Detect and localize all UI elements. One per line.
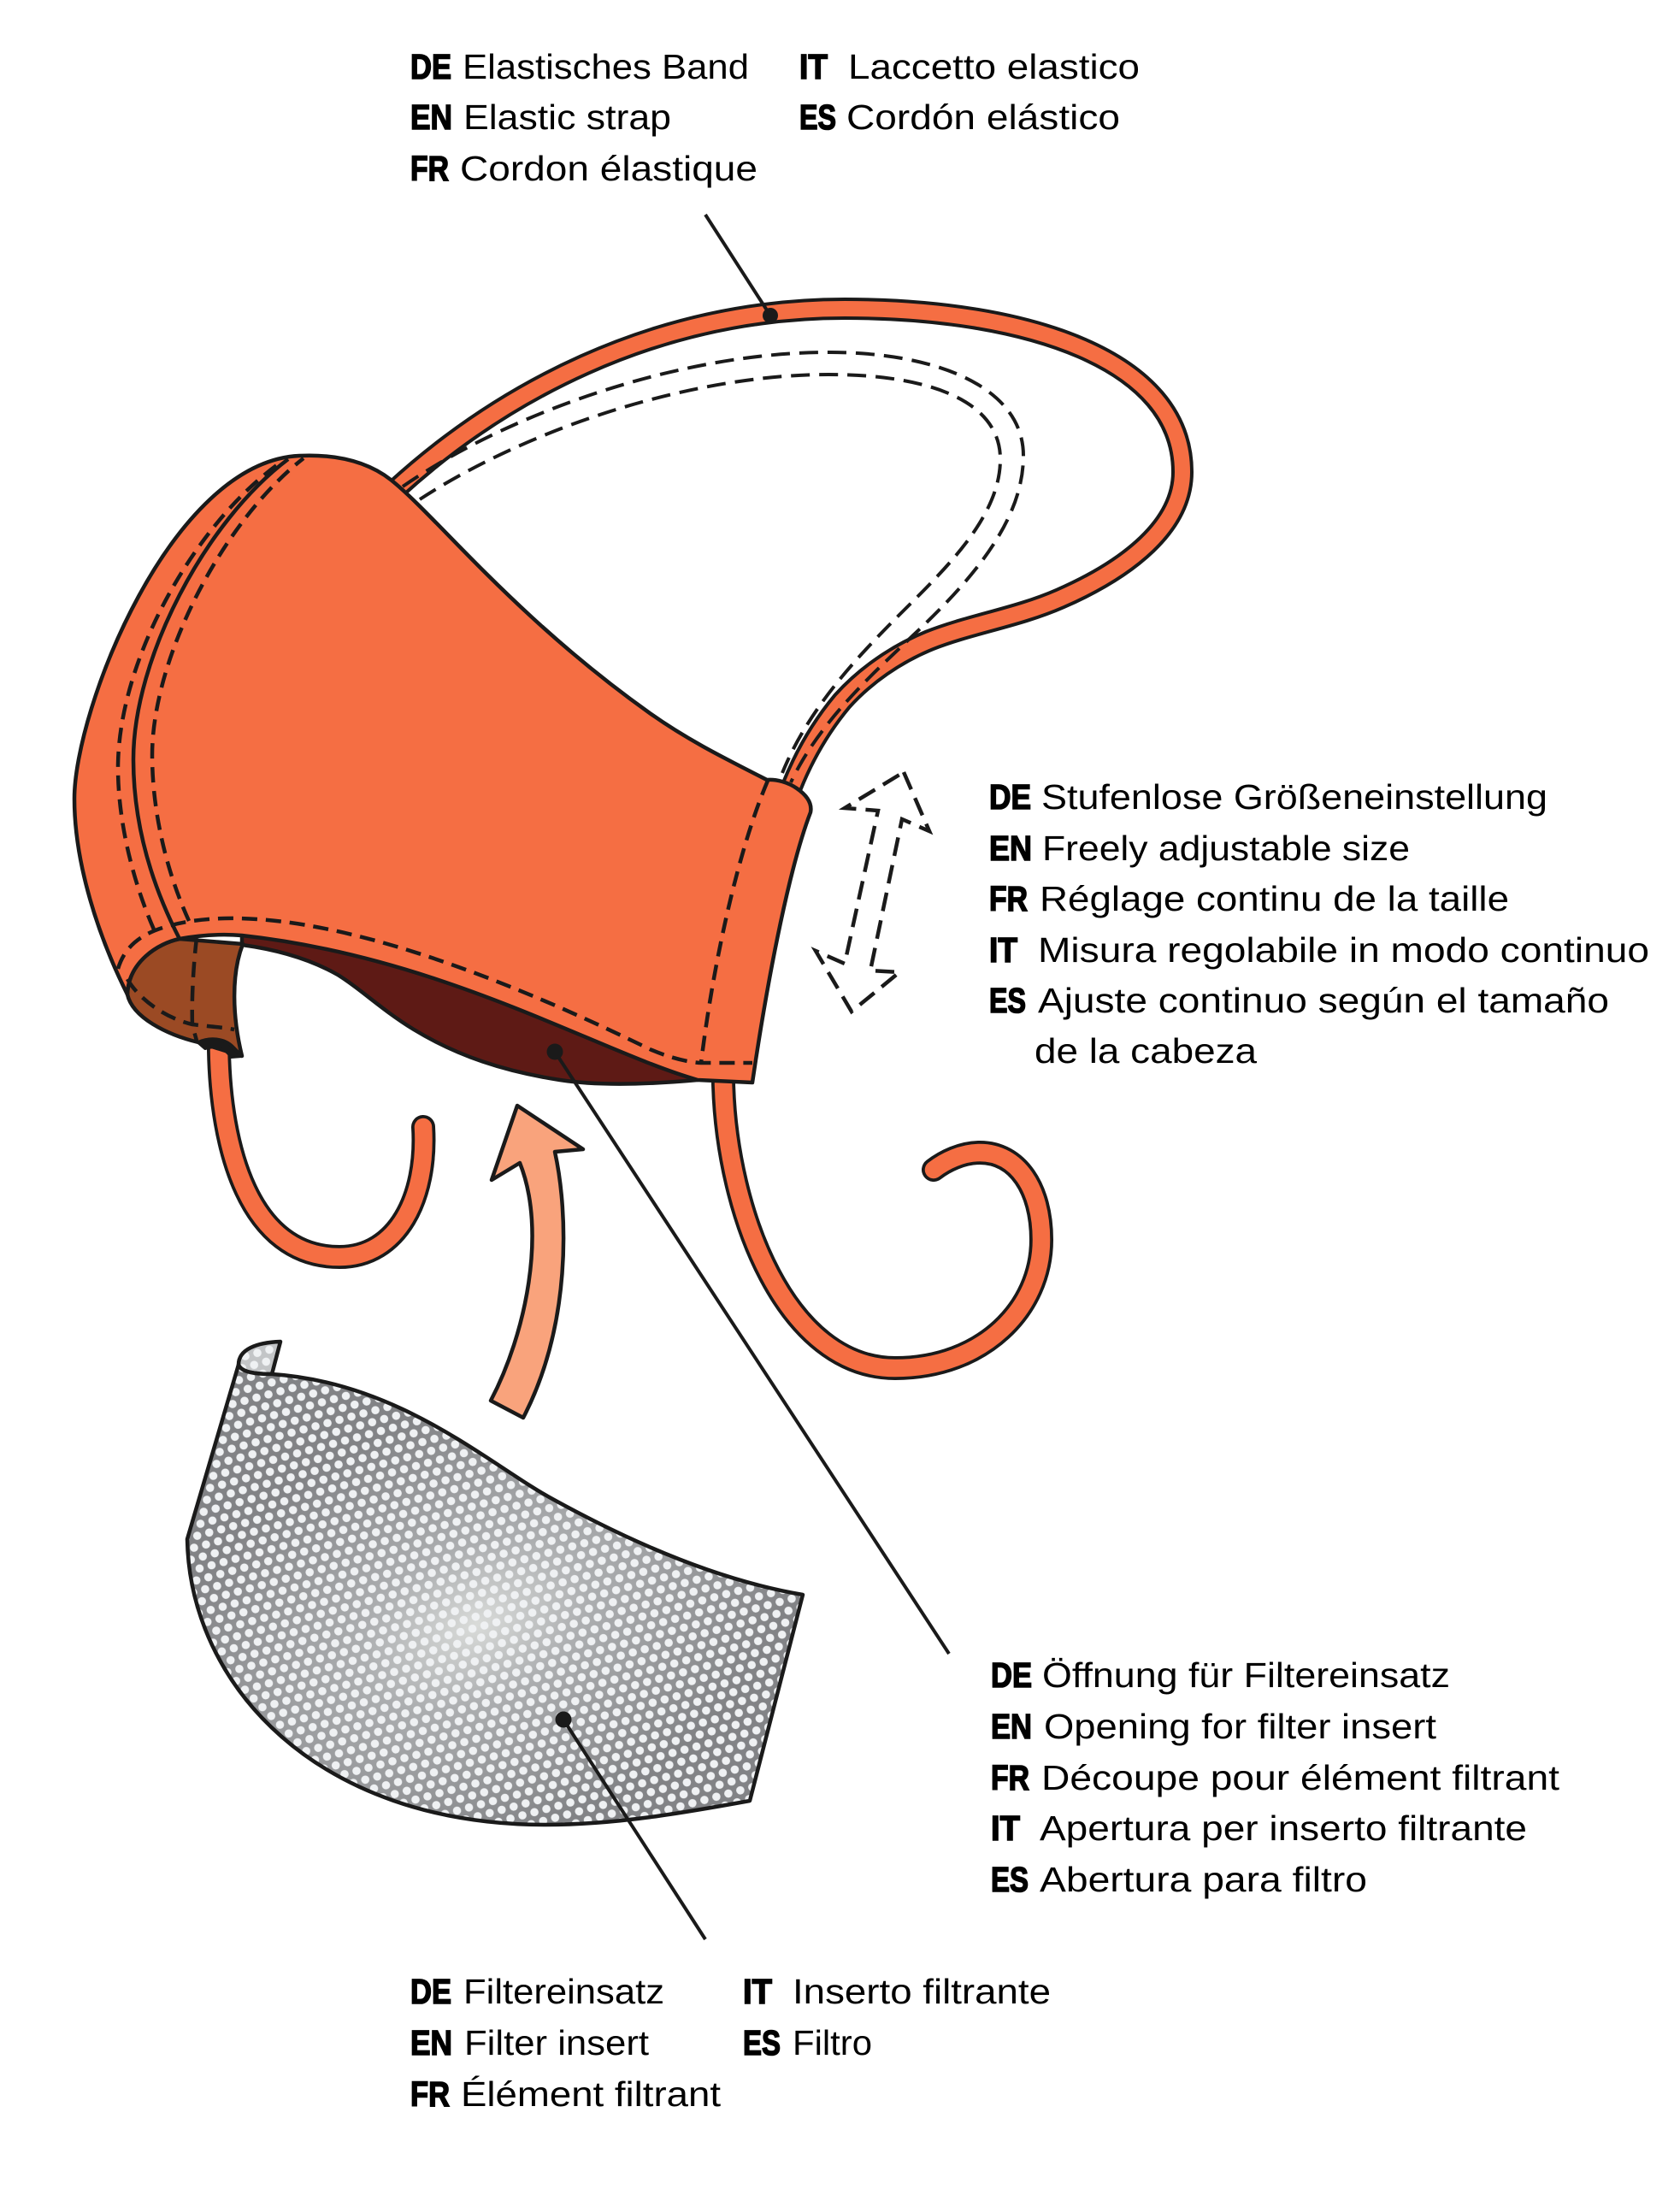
- leader line: elastic strap: [705, 215, 778, 323]
- mask front fabric: [74, 456, 811, 1083]
- text block: filter insert: EN: [410, 2023, 452, 2062]
- text block: filter insert: Filtereinsatz: [463, 1972, 664, 2011]
- text block: filter opening: [991, 1655, 1560, 1899]
- elastic strap: back loop: [395, 309, 1182, 787]
- text block: elastic strap: FR: [410, 149, 449, 188]
- text block: filter opening: IT: [991, 1808, 1020, 1848]
- strap eyelet: [198, 1039, 242, 1057]
- filter insert: [187, 1342, 803, 1825]
- text block: filter opening: ES: [991, 1860, 1029, 1899]
- text block: elastic strap: EN: [410, 97, 452, 137]
- text block: filter opening: Apertura per inserto filtrante: [1040, 1808, 1527, 1848]
- text block: filter insert: DE: [410, 1972, 451, 2011]
- text block: filter opening: Découpe pour élément filtrant: [1041, 1758, 1560, 1797]
- text block: adjustable size: Réglage continu de la taille: [1040, 879, 1509, 918]
- text block: elastic strap: ES: [799, 97, 836, 137]
- text block: filter opening: DE: [991, 1655, 1032, 1695]
- text block: filter opening: EN: [991, 1707, 1032, 1746]
- leader line: filter insert: [556, 1712, 705, 1939]
- text block: adjustable size: Stufenlose Größeneinstellung: [1041, 777, 1547, 817]
- text block: adjustable size: Freely adjustable size: [1042, 829, 1410, 868]
- text block: filter insert: IT: [743, 1972, 772, 2011]
- text block: filter opening: FR: [991, 1758, 1029, 1797]
- text block: elastic strap: Elastic strap: [463, 97, 671, 137]
- text block: adjustable size: ES: [989, 981, 1026, 1020]
- text block: filter insert: Filter insert: [464, 2023, 650, 2062]
- text block: filter insert: ES: [743, 2023, 781, 2062]
- arrow: adjustable size: [816, 772, 929, 1012]
- mask body: [74, 456, 811, 1084]
- text block: elastic strap: Cordon élastique: [460, 149, 757, 188]
- text block: adjustable size: [989, 777, 1649, 1071]
- text block: filter insert: Inserto filtrante: [793, 1972, 1051, 2011]
- elastic strap: lower left end: [219, 1050, 423, 1257]
- dashed outline: adjusted strap position: [403, 352, 1023, 782]
- filter perforation: [187, 1365, 803, 1825]
- filter curl: [239, 1342, 280, 1374]
- text block: adjustable size: de la cabeza: [1035, 1031, 1257, 1071]
- text block: filter insert: Filtro: [793, 2023, 872, 2062]
- text block: filter opening: Abertura para filtro: [1040, 1860, 1367, 1899]
- text block: filter insert: Élément filtrant: [461, 2074, 722, 2114]
- leader line: filter opening: [547, 1043, 949, 1654]
- text block: filter insert: [410, 1972, 1051, 2114]
- filter sheet: [187, 1365, 803, 1825]
- text block: elastic strap: Laccetto elastico: [848, 47, 1140, 86]
- text block: elastic strap: Elastisches Band: [463, 47, 749, 86]
- text block: adjustable size: FR: [989, 879, 1028, 918]
- elastic strap: lower right end: [723, 1083, 1041, 1368]
- centre seam: [133, 459, 288, 939]
- text block: adjustable size: Misura regolabile in modo continuo: [1038, 930, 1649, 970]
- text block: elastic strap: DE: [410, 47, 451, 86]
- text block: filter opening: Opening for filter insert: [1044, 1707, 1437, 1746]
- arrow: insert filter into opening: [491, 1106, 583, 1418]
- text block: elastic strap: IT: [799, 47, 828, 86]
- mask interior: filter opening: [242, 932, 698, 1084]
- text block: adjustable size: Ajuste continuo según el tamaño: [1038, 981, 1609, 1020]
- text block: elastic strap: [410, 47, 1140, 188]
- mask interior: inner fold: [127, 939, 243, 1056]
- text block: adjustable size: EN: [989, 829, 1032, 868]
- stitching: [118, 458, 768, 1063]
- text block: filter insert: FR: [410, 2074, 450, 2114]
- text block: elastic strap: Cordón elástico: [846, 97, 1120, 137]
- text block: adjustable size: DE: [989, 777, 1031, 817]
- text block: filter opening: Öffnung für Filtereinsatz: [1042, 1655, 1450, 1695]
- text block: adjustable size: IT: [989, 930, 1017, 970]
